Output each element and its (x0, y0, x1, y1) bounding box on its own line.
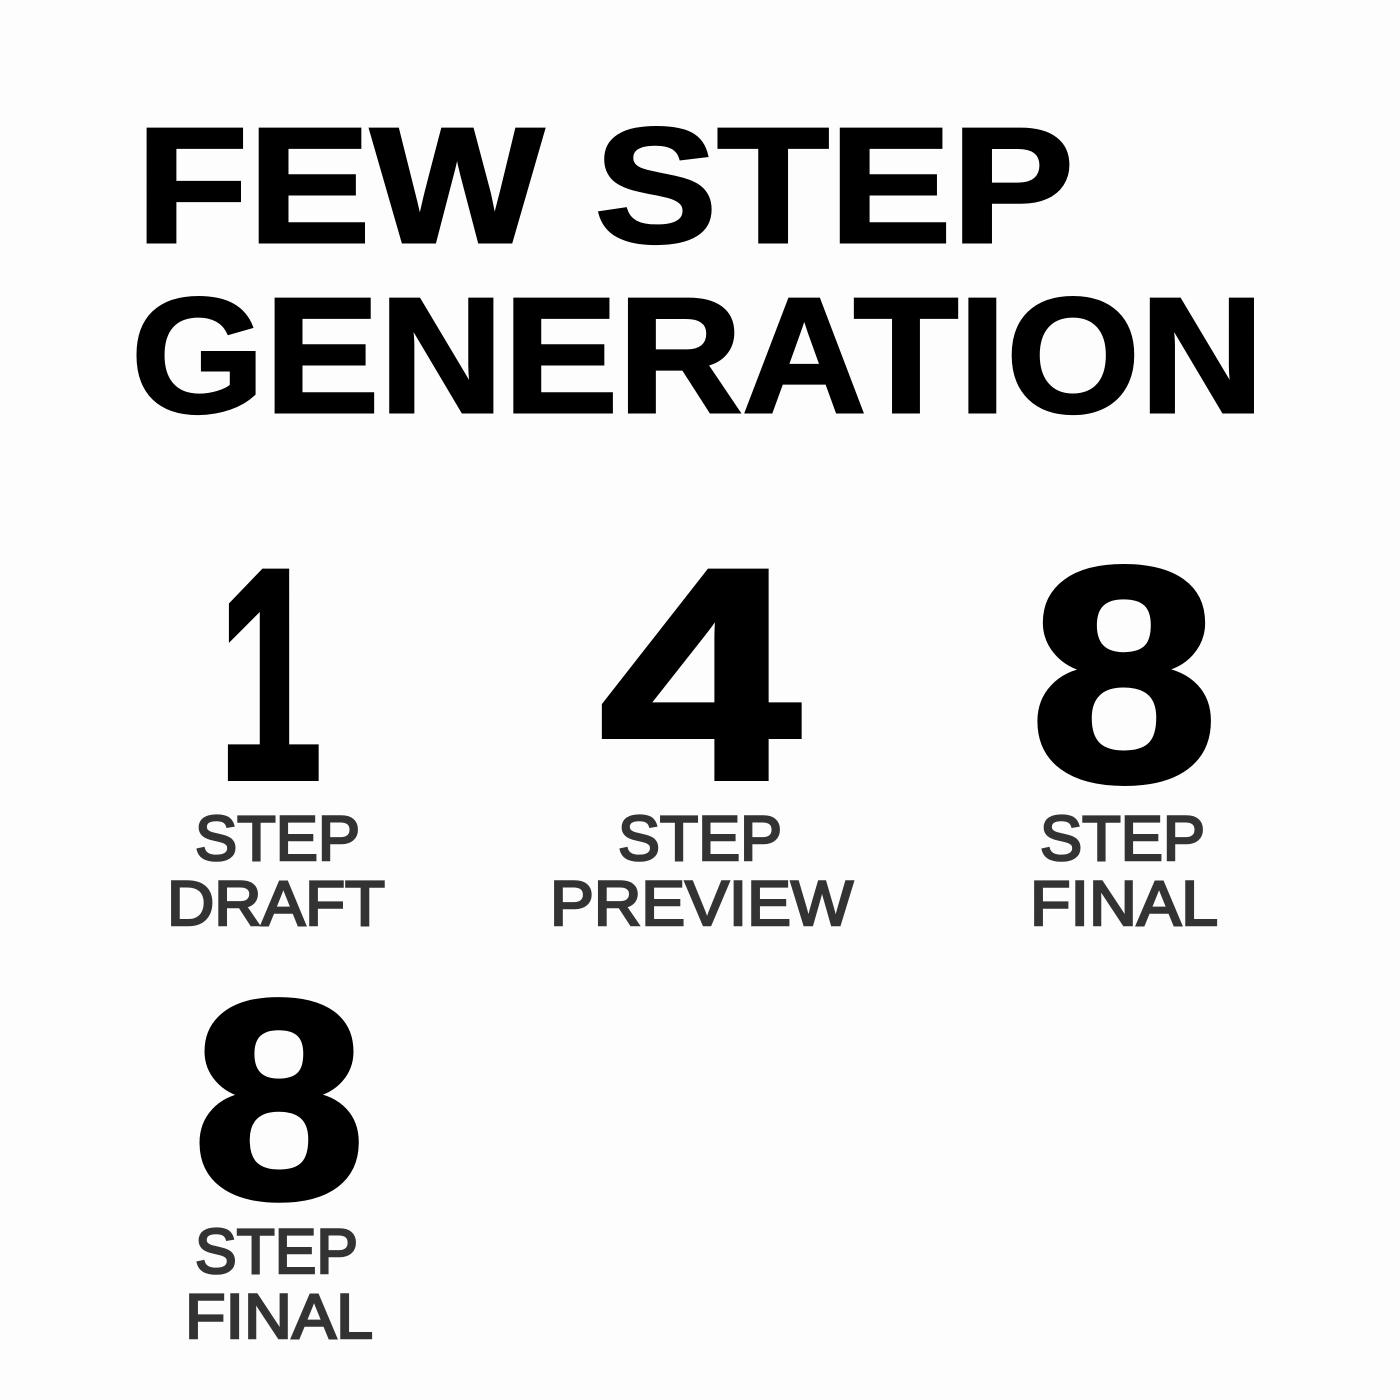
step item: 4 step preview: PREVIEW (550, 869, 854, 939)
step item: 1 step draft: DRAFT (167, 869, 385, 939)
step item: 4 step preview (550, 506, 854, 939)
step item: 8 step final (second): FINAL (185, 1282, 373, 1352)
step item: 1 step draft (167, 506, 385, 939)
step item: 8 step final: STEP (1040, 804, 1205, 874)
title: FEW STEP (136, 94, 1074, 277)
step item: 1 step draft: 1 (218, 506, 322, 842)
step item: 8 step final: 8 (1030, 504, 1218, 845)
step item: 8 step final (second) (185, 942, 373, 1352)
title (131, 94, 1264, 447)
step item: 8 step final (second): STEP (195, 1217, 358, 1287)
step item: 1 step draft: STEP (195, 804, 360, 874)
title: GENERATION (131, 264, 1264, 447)
step item: 8 step final (second): 8 (193, 942, 365, 1257)
step item: 8 step final: FINAL (1030, 869, 1218, 939)
step item: 4 step preview: 4 (600, 506, 802, 842)
step item: 4 step preview: STEP (618, 804, 782, 874)
